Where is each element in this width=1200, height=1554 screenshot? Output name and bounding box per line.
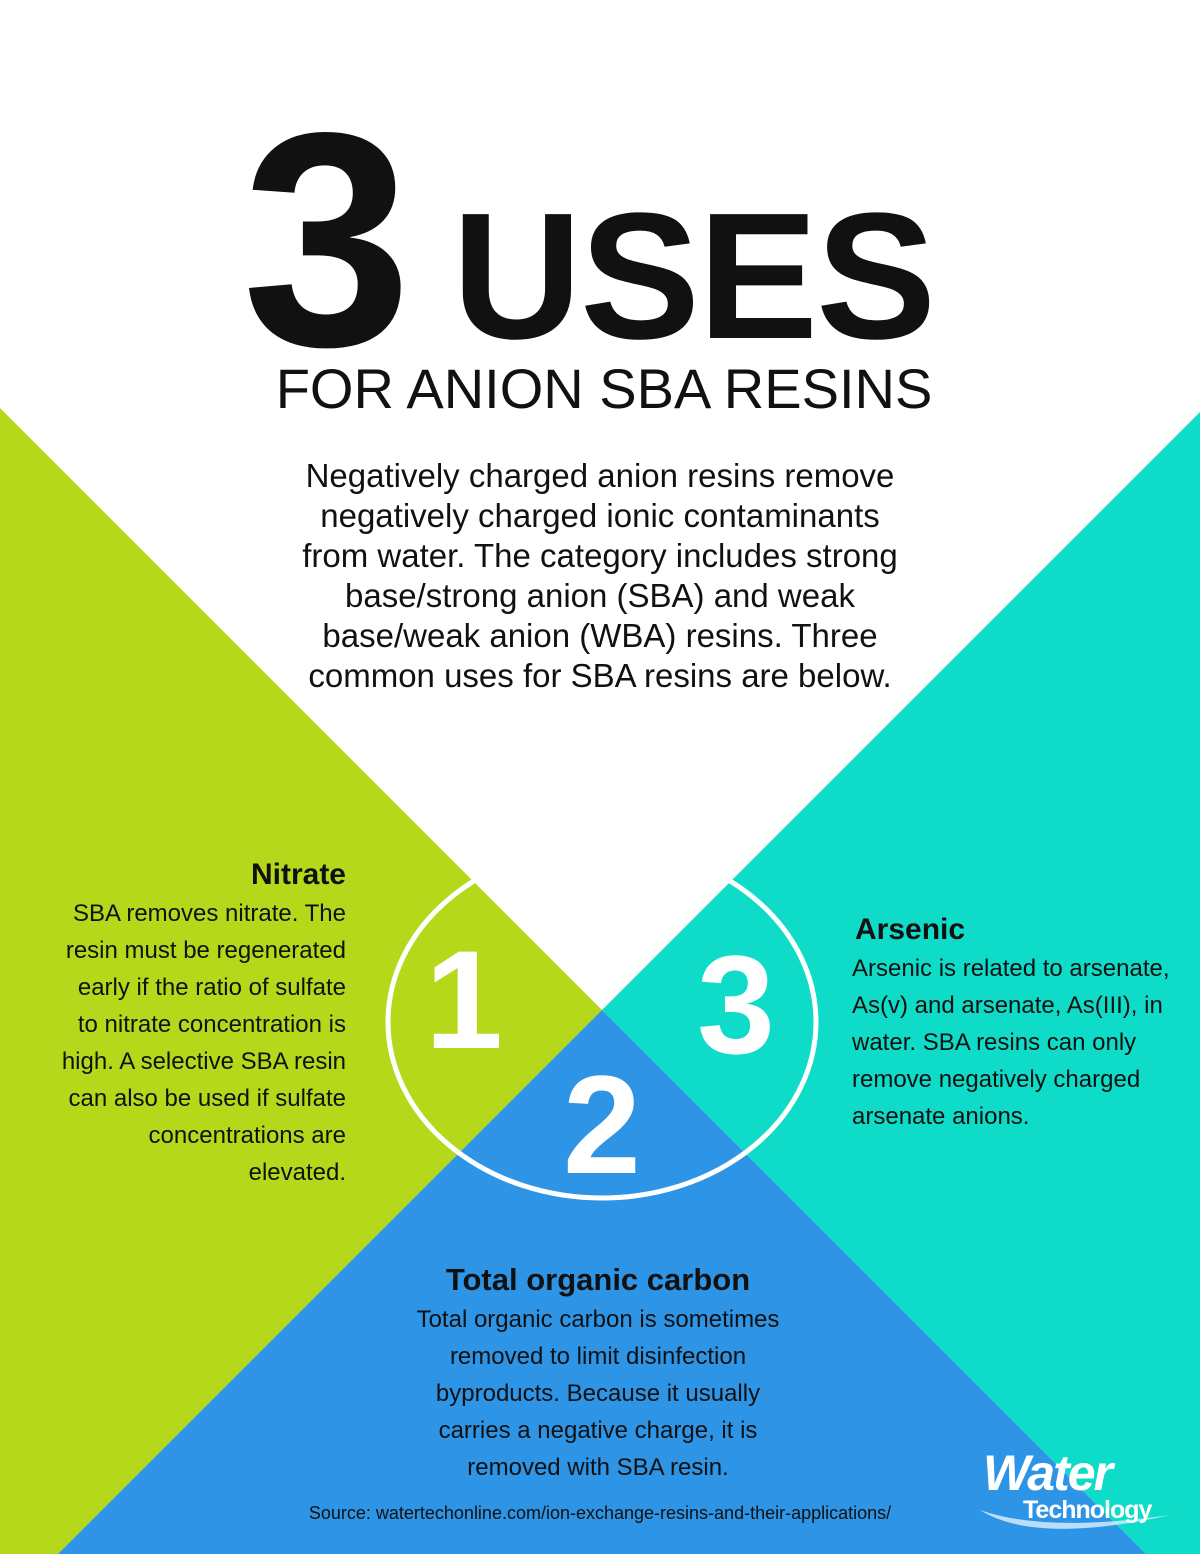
text: arsenic: remove negatively charged xyxy=(852,1066,1140,1093)
text: toc: removed with SBA resin. xyxy=(467,1454,729,1481)
number 3: 3 xyxy=(697,926,775,1083)
text: nitrate: elevated. xyxy=(249,1159,346,1186)
panel: nitrate xyxy=(62,858,346,1186)
text: arsenic: As(v) and arsenate, As(III), in xyxy=(852,992,1163,1019)
text: nitrate: resin must be regenerated xyxy=(66,937,346,964)
text: arsenic xyxy=(852,955,1170,1130)
text: nitrate: to nitrate concentration is xyxy=(78,1011,346,1038)
text: toc: byproducts. Because it usually xyxy=(436,1380,760,1407)
text: toc: carries a negative charge, it is xyxy=(439,1417,757,1444)
intro paragraph: base/strong anion (SBA) and weak xyxy=(345,577,855,614)
logo: Technology xyxy=(1023,1496,1151,1524)
intro paragraph: Negatively charged anion resins remove xyxy=(306,457,894,494)
subtitle: FOR ANION SBA RESINS xyxy=(276,357,932,420)
title xyxy=(242,69,934,410)
intro paragraph: common uses for SBA resins are below. xyxy=(308,657,892,694)
source: Source: watertechonline.com/ion-exchange-resins-and-their-applications/ xyxy=(309,1503,891,1523)
text: nitrate: can also be used if sulfate xyxy=(68,1085,346,1112)
text: nitrate: SBA removes nitrate. The xyxy=(73,900,346,927)
text: toc: removed to limit disinfection xyxy=(450,1343,746,1370)
logo xyxy=(980,1445,1170,1529)
text: nitrate: early if the ratio of sulfate xyxy=(78,974,346,1001)
intro paragraph: from water. The category includes strong xyxy=(302,537,898,574)
text: nitrate: high. A selective SBA resin xyxy=(62,1048,346,1075)
logo: Water xyxy=(983,1445,1111,1501)
heading: toc: Total organic carbon xyxy=(446,1262,750,1297)
number 1: 1 xyxy=(425,921,503,1078)
heading: arsenic: Arsenic xyxy=(855,913,965,946)
intro paragraph: negatively charged ionic contaminants xyxy=(320,497,880,534)
intro paragraph: base/weak anion (WBA) resins. Three xyxy=(322,617,878,654)
title: USES xyxy=(452,176,934,377)
number 2: 2 xyxy=(563,1046,641,1203)
text: arsenic: Arsenic is related to arsenate, xyxy=(852,955,1170,982)
text: nitrate: concentrations are xyxy=(149,1122,346,1149)
text: toc: Total organic carbon is sometimes xyxy=(417,1306,779,1333)
text: nitrate xyxy=(62,900,346,1186)
text: arsenic: water. SBA resins can only xyxy=(852,1029,1136,1056)
text: toc xyxy=(417,1306,779,1481)
panel: total organic carbon xyxy=(417,1262,779,1481)
heading: nitrate: Nitrate xyxy=(251,858,346,891)
title: 3 xyxy=(242,69,402,410)
text: arsenic: arsenate anions. xyxy=(852,1103,1029,1130)
intro paragraph xyxy=(302,457,898,694)
panel: arsenic xyxy=(852,913,1170,1130)
